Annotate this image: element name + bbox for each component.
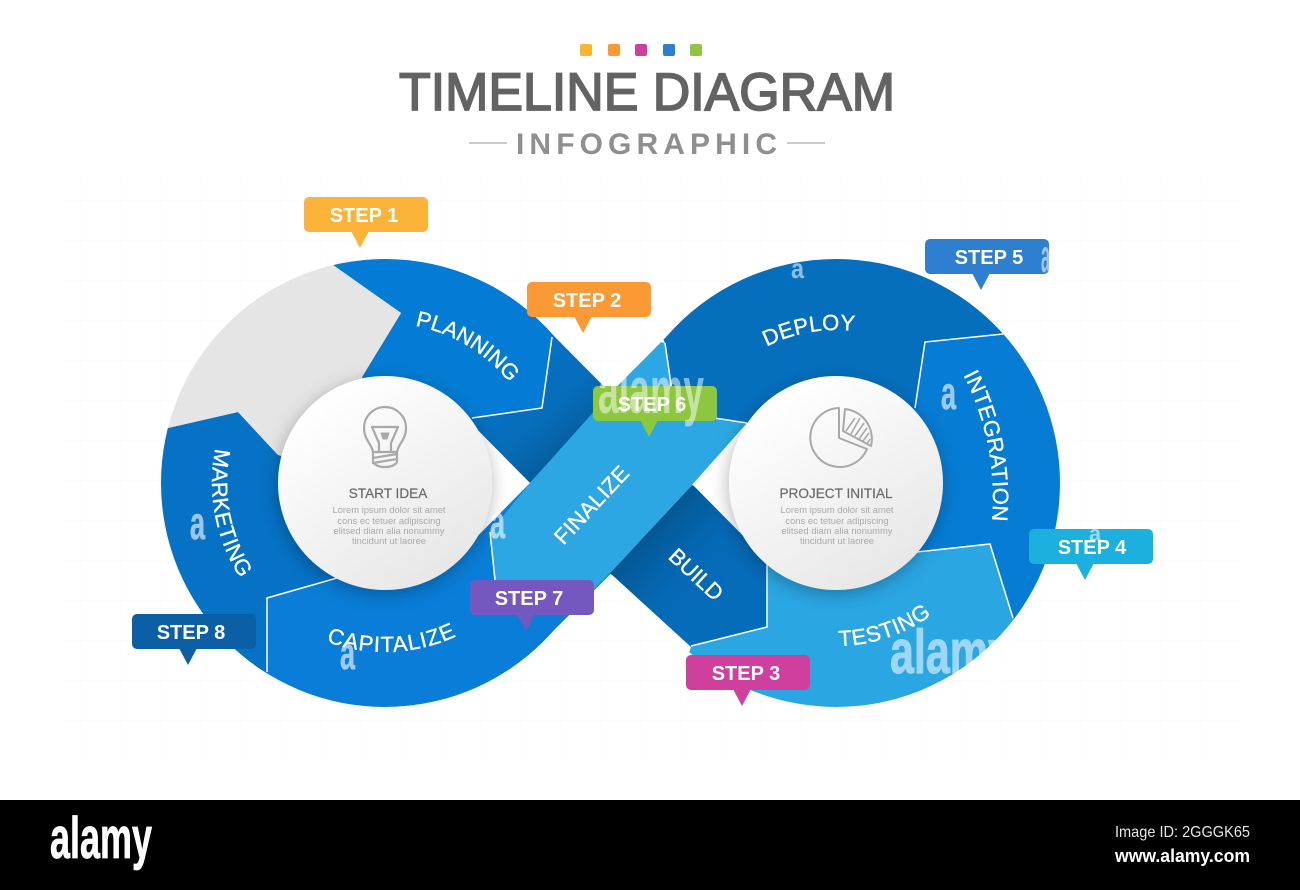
disc body text xyxy=(780,504,894,546)
icon: light bulb xyxy=(364,407,406,467)
left hole xyxy=(478,430,530,536)
step 6 tag: STEP 6 xyxy=(618,394,686,416)
right hole xyxy=(694,486,743,536)
disc body text: tincidunt ut laoree xyxy=(800,535,874,546)
label: marketing: MARKETING xyxy=(212,450,251,576)
step 4 tag xyxy=(1029,529,1153,580)
left disc: start idea xyxy=(278,376,492,590)
footer logo: alamy xyxy=(50,806,152,871)
watermarks: alamy xyxy=(598,353,704,427)
segment: testing xyxy=(689,544,1014,707)
step 7 tag xyxy=(470,580,594,631)
step 2 tag xyxy=(527,282,651,333)
watermarks: a xyxy=(941,367,956,419)
watermarks: a xyxy=(791,253,804,284)
disc body text xyxy=(332,504,446,546)
segment borders xyxy=(267,334,1013,672)
step 6 tag xyxy=(593,386,717,437)
step 3 tag xyxy=(686,655,810,706)
label: testing: TESTING xyxy=(838,605,929,646)
segment: integration xyxy=(914,334,1060,619)
title: TIMELINE DIAGRAM xyxy=(399,63,895,122)
watermarks: a xyxy=(490,496,505,548)
segment: capitalize xyxy=(267,483,612,707)
segment: under-planning band xyxy=(470,282,604,483)
watermarks: a xyxy=(1089,521,1102,546)
step 5 tag xyxy=(925,239,1049,290)
label: capitalize: CAPITALIZE xyxy=(328,622,456,652)
disc heading: START IDEA xyxy=(349,486,428,501)
label: deploy: DEPLOY xyxy=(762,314,856,346)
step 1 tag: STEP 1 xyxy=(330,205,398,227)
segment: planning xyxy=(333,259,552,419)
watermarks: alamy xyxy=(890,618,1012,687)
step 7 tag: STEP 7 xyxy=(495,588,563,610)
watermarks: a xyxy=(340,627,355,679)
label: integration: INTEGRATION xyxy=(964,370,1009,520)
disc body text: Lorem ipsum dolor sit amet xyxy=(332,504,446,515)
segment: finalize xyxy=(490,340,747,598)
icon: pie chart xyxy=(810,408,872,467)
image id: Image ID: 2GGGK65 xyxy=(1115,824,1250,841)
watermarks: a xyxy=(190,497,205,549)
segment: marketing xyxy=(161,412,336,674)
label: planning: PLANNING xyxy=(416,311,518,380)
segment: gray placeholder xyxy=(168,265,401,456)
infinity band xyxy=(161,259,1060,707)
disc body text: tincidunt ut laoree xyxy=(352,535,426,546)
disc body text: elitsed diam alia nonummy xyxy=(782,525,893,536)
step 8 tag: STEP 8 xyxy=(157,622,225,644)
step 4 tag: STEP 4 xyxy=(1058,537,1127,559)
label: finalize: FINALIZE xyxy=(549,460,634,549)
watermarks: a xyxy=(1041,230,1050,282)
disc body text: Lorem ipsum dolor sit amet xyxy=(780,504,894,515)
watermarks xyxy=(190,230,1102,687)
subtitle: INFOGRAPHIC xyxy=(516,128,777,161)
footer url: www.alamy.com xyxy=(1114,846,1250,866)
disc heading: PROJECT INITIAL xyxy=(779,486,893,501)
step 1 tag xyxy=(304,197,428,248)
segment: build xyxy=(610,485,767,647)
footer bar xyxy=(0,800,1300,890)
step 3 tag: STEP 3 xyxy=(712,663,780,685)
disc body text: elitsed diam alia nonummy xyxy=(334,525,445,536)
segment: deploy xyxy=(664,259,1003,424)
label: build: BUILD xyxy=(664,543,728,606)
step 2 tag: STEP 2 xyxy=(553,290,621,312)
right disc: project initial xyxy=(729,376,943,590)
colour dots xyxy=(580,44,702,56)
step 8 tag xyxy=(132,614,256,665)
step 5 tag: STEP 5 xyxy=(955,247,1023,269)
disc body text: cons ec tetuer adipiscing xyxy=(785,515,889,526)
disc body text: cons ec tetuer adipiscing xyxy=(337,515,441,526)
